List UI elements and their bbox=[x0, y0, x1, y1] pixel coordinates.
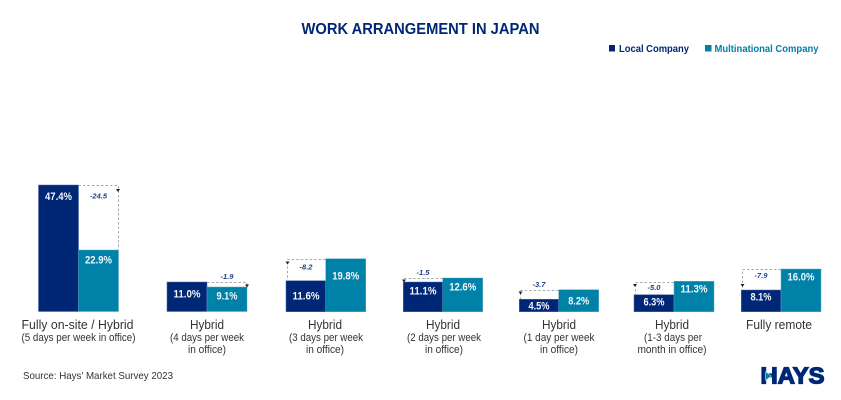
group: hybrid 1-3 days per month: (1-3 days per bbox=[644, 332, 702, 344]
group: fully remote: 8.1% bbox=[750, 292, 772, 304]
logo: Hays: HAYS bbox=[760, 363, 824, 389]
legend bbox=[609, 43, 819, 55]
group: hybrid 4 days: (4 days per week bbox=[170, 332, 244, 344]
group: hybrid 4 days bbox=[167, 272, 249, 356]
group: hybrid 1-3 days per month: -5.0 bbox=[648, 283, 661, 292]
group: hybrid 4 days: -1.9 bbox=[221, 272, 234, 281]
group: hybrid 2 days: 11.1% bbox=[410, 286, 437, 298]
group: hybrid 1 day: Hybrid bbox=[542, 317, 576, 332]
group: hybrid 1 day: -3.7 bbox=[533, 280, 546, 289]
group: fully remote bbox=[740, 269, 821, 332]
group: fully on-site bbox=[22, 185, 136, 344]
group: hybrid 3 days: Hybrid bbox=[308, 317, 342, 332]
group: fully on-site: Fully on-site / Hybrid bbox=[22, 317, 134, 332]
group: hybrid 1-3 days per month: Hybrid bbox=[655, 317, 689, 332]
group: fully remote: 16.0% bbox=[788, 272, 815, 284]
group: fully remote: Fully remote bbox=[746, 317, 812, 332]
group: hybrid 4 days: in office) bbox=[188, 344, 226, 356]
source note: Source: Hays' Market Survey 2023 bbox=[23, 370, 173, 382]
group: hybrid 2 days: -1.5 bbox=[417, 268, 430, 277]
group: hybrid 1-3 days per month: 6.3% bbox=[644, 296, 665, 308]
group: hybrid 4 days: Hybrid bbox=[190, 317, 224, 332]
group: hybrid 3 days: 11.6% bbox=[292, 290, 320, 302]
group: hybrid 2 days: (2 days per week bbox=[407, 332, 481, 344]
group: fully on-site: 22.9% bbox=[85, 254, 112, 266]
group: fully on-site: 47.4% bbox=[45, 191, 72, 203]
group: hybrid 3 days: -8.2 bbox=[300, 262, 313, 272]
group: hybrid 1-3 days per month bbox=[633, 281, 714, 356]
group: fully remote: -7.9 bbox=[755, 271, 768, 280]
group: hybrid 2 days: Hybrid bbox=[426, 317, 460, 332]
group: hybrid 1 day: in office) bbox=[540, 344, 578, 356]
group: hybrid 3 days: (3 days per week bbox=[289, 332, 363, 344]
group: hybrid 2 days: 12.6% bbox=[449, 282, 476, 294]
group: hybrid 4 days: 9.1% bbox=[216, 290, 238, 302]
group: hybrid 3 days: in office) bbox=[306, 344, 344, 356]
group: hybrid 3 days: 19.8% bbox=[332, 270, 359, 282]
group: hybrid 2 days bbox=[402, 268, 483, 356]
group: hybrid 1 day: 4.5% bbox=[528, 300, 550, 312]
title: WORK ARRANGEMENT IN JAPAN bbox=[302, 21, 540, 38]
group: hybrid 1 day: 8.2% bbox=[568, 296, 589, 308]
group: fully on-site: (5 days per week in office) bbox=[22, 332, 136, 344]
group: fully on-site: -24.5 bbox=[90, 192, 108, 200]
group: hybrid 1 day: (1 day per week bbox=[524, 332, 595, 344]
group: hybrid 3 days bbox=[286, 259, 366, 356]
group: hybrid 1 day bbox=[518, 280, 599, 356]
group: hybrid 1-3 days per month: month in office) bbox=[638, 344, 706, 356]
legend: Multinational Company bbox=[714, 43, 819, 55]
group: hybrid 4 days: 11.0% bbox=[174, 288, 201, 300]
legend: Local Company bbox=[619, 43, 689, 55]
group: hybrid 2 days: in office) bbox=[425, 344, 463, 356]
group: hybrid 1-3 days per month: 11.3% bbox=[680, 284, 708, 296]
